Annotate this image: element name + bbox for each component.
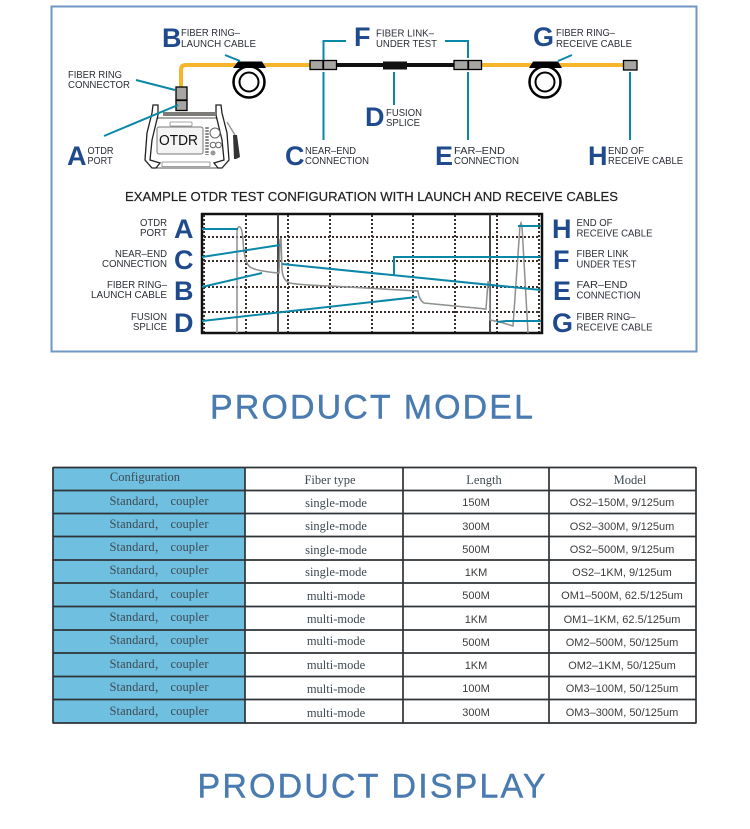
table column: length: 1KM: [465, 614, 487, 626]
chart legend: left: B: [174, 276, 194, 306]
table column: model: [561, 473, 683, 719]
label: F fiber link under test: UNDER TEST: [376, 38, 438, 50]
icon: OTDR device: [145, 105, 240, 168]
label: D fusion splice: D: [365, 102, 384, 132]
label: G receive cable: [533, 22, 632, 52]
table column: length: 500M: [462, 637, 490, 649]
table column: length: 500M: [462, 544, 490, 556]
label: A OTDR port: [67, 141, 114, 171]
table column: fiber type: multi-mode: [307, 589, 366, 603]
label: C near-end connection: C: [285, 141, 304, 171]
end connector: [624, 60, 637, 70]
label: F fiber link under test: FIBER LINK–: [376, 28, 434, 40]
chart legend: right: FIBER RING–: [576, 311, 636, 323]
table column: length: 100M: [462, 683, 490, 695]
table column: configuration: Standard， coupler: [110, 587, 209, 601]
table column: configuration: Standard， coupler: [110, 680, 209, 694]
label: G receive cable: FIBER RING–: [556, 27, 615, 39]
trace callouts: [202, 226, 541, 322]
label: B launch cable: LAUNCH CABLE: [181, 38, 256, 50]
chart legend: right: END OF: [576, 217, 612, 229]
chart legend: left: NEAR–END: [115, 248, 167, 260]
OTDR port and ring connector: [176, 87, 187, 110]
table column: configuration: Standard， coupler: [110, 563, 209, 577]
table column: length: [462, 473, 502, 719]
label: B launch cable: FIBER RING–: [181, 27, 240, 39]
label: fiber ring connector: [68, 69, 130, 91]
table column: length: 1KM: [465, 567, 487, 579]
table column: model: OS2–150M, 9/125um: [570, 497, 674, 509]
chart legend: left: OTDR: [140, 217, 167, 229]
heading: product display: PRODUCT DISPLAY: [198, 768, 546, 806]
label: F fiber link under test: [354, 22, 438, 52]
table column: length: 150M: [462, 497, 490, 509]
chart legend: left: [91, 214, 194, 338]
label: D fusion splice: SPLICE: [386, 117, 420, 129]
near-end connector: [310, 60, 336, 70]
table column: fiber type: single-mode: [305, 496, 367, 510]
table column: configuration: Standard， coupler: [110, 704, 209, 718]
table column: length: 300M: [462, 521, 490, 533]
leader lines: [104, 41, 630, 140]
table column: model: OS2–300M, 9/125um: [570, 521, 674, 533]
table column: model: Model: [614, 473, 647, 487]
table column: configuration: Standard， coupler: [110, 540, 209, 554]
label: C near-end connection: NEAR–END: [305, 145, 356, 157]
chart legend: left: PORT: [140, 227, 168, 239]
table column: length: 1KM: [465, 660, 487, 672]
table column: model: OM3–100M, 50/125um: [566, 683, 678, 695]
table column: configuration: Standard， coupler: [110, 633, 209, 647]
chart legend: left: SPLICE: [133, 321, 167, 333]
chart legend: right: RECEIVE CABLE: [576, 228, 652, 240]
icon: launch cable ring: [233, 62, 266, 98]
chart legend: right: RECEIVE CABLE: [576, 322, 652, 334]
table column: length: Length: [466, 473, 502, 487]
heading: product model: PRODUCT MODEL: [210, 388, 533, 426]
table column: model: OM2–500M, 50/125um: [566, 637, 678, 649]
label: H end of receive cable: [588, 141, 683, 171]
label: E far-end connection: FAR–END: [454, 145, 505, 157]
label: A OTDR port: PORT: [88, 155, 113, 167]
chart legend: right: F: [553, 245, 570, 275]
far-end connector: [454, 60, 482, 70]
fusion splice: [383, 62, 407, 70]
table column: configuration: Standard， coupler: [110, 657, 209, 671]
icon: OTDR device: OTDR: [159, 133, 198, 149]
table column: configuration: [110, 470, 209, 718]
table column: model: OM3–300M, 50/125um: [566, 707, 678, 719]
table column: configuration: Standard， coupler: [110, 517, 209, 531]
label: B launch cable: [162, 23, 256, 53]
label: E far-end connection: E: [435, 141, 453, 171]
chart legend: right: [552, 214, 652, 338]
label: fiber ring connector: FIBER RING: [68, 69, 122, 81]
label: H end of receive cable: H: [588, 141, 608, 171]
chart legend: right: G: [552, 308, 573, 338]
label: C near-end connection: [285, 141, 369, 171]
table column: model: OM1–500M, 62.5/125um: [561, 590, 683, 602]
chart legend: left: C: [174, 245, 194, 275]
table column: configuration: Standard， coupler: [110, 494, 209, 508]
table column: fiber type: single-mode: [305, 543, 367, 557]
label: B launch cable: B: [162, 23, 182, 53]
chart title: EXAMPLE OTDR TEST CONFIGURATION WITH LAUNCH AND RECEIVE CABLES: [125, 189, 618, 204]
table column: fiber type: multi-mode: [307, 612, 366, 626]
chart legend: right: E: [553, 276, 571, 306]
label: D fusion splice: [365, 102, 422, 132]
table column: model: OS2–500M, 9/125um: [570, 544, 674, 556]
chart legend: right: UNDER TEST: [576, 258, 637, 270]
table column: fiber type: multi-mode: [307, 658, 366, 672]
chart legend: right: FAR–END: [576, 279, 628, 291]
label: D fusion splice: FUSION: [386, 107, 422, 119]
label: A OTDR port: A: [67, 141, 86, 171]
table column: fiber type: multi-mode: [307, 634, 366, 648]
label: E far-end connection: CONNECTION: [454, 155, 519, 167]
label: F fiber link under test: F: [354, 22, 370, 52]
chart legend: left: FIBER RING–: [107, 279, 167, 291]
table column: fiber type: single-mode: [305, 519, 367, 533]
chart legend: right: CONNECTION: [576, 290, 640, 302]
fiber cable run: [181, 65, 624, 88]
label: C near-end connection: CONNECTION: [305, 155, 369, 167]
table column: length: 500M: [462, 590, 490, 602]
label: G receive cable: RECEIVE CABLE: [556, 38, 632, 50]
table column: fiber type: single-mode: [305, 565, 367, 579]
label: fiber ring connector: CONNECTOR: [68, 79, 130, 91]
table column: model: OS2–1KM, 9/125um: [572, 567, 672, 579]
chart: OTDR trace: [202, 214, 542, 333]
table column: fiber type: multi-mode: [307, 682, 366, 696]
table column: model: OM1–1KM, 62.5/125um: [564, 614, 680, 626]
label: H end of receive cable: END OF: [608, 145, 644, 157]
chart legend: left: CONNECTION: [102, 258, 167, 270]
chart legend: left: LAUNCH CABLE: [91, 289, 167, 301]
table column: fiber type: multi-mode: [307, 706, 366, 720]
chart legend: right: H: [552, 214, 572, 244]
table column: model: OM2–1KM, 50/125um: [568, 660, 676, 672]
table column: configuration: Standard， coupler: [110, 610, 209, 624]
table column: configuration: Configuration: [110, 470, 181, 484]
table column: fiber type: [304, 473, 367, 720]
chart legend: left: A: [174, 214, 194, 244]
table column: fiber type: Fiber type: [304, 473, 356, 487]
label: A OTDR port: OTDR: [88, 145, 114, 157]
chart legend: left: FUSION: [131, 311, 167, 323]
chart legend: right: FIBER LINK: [576, 248, 628, 260]
chart legend: left: D: [174, 308, 194, 338]
table: product models: [53, 467, 696, 724]
label: H end of receive cable: RECEIVE CABLE: [608, 155, 683, 167]
label: G receive cable: G: [533, 22, 554, 52]
icon: receive cable ring: [529, 62, 562, 98]
table column: length: 300M: [462, 707, 490, 719]
label: E far-end connection: [435, 141, 519, 171]
panel: OTDR test configuration diagram: [52, 6, 696, 352]
